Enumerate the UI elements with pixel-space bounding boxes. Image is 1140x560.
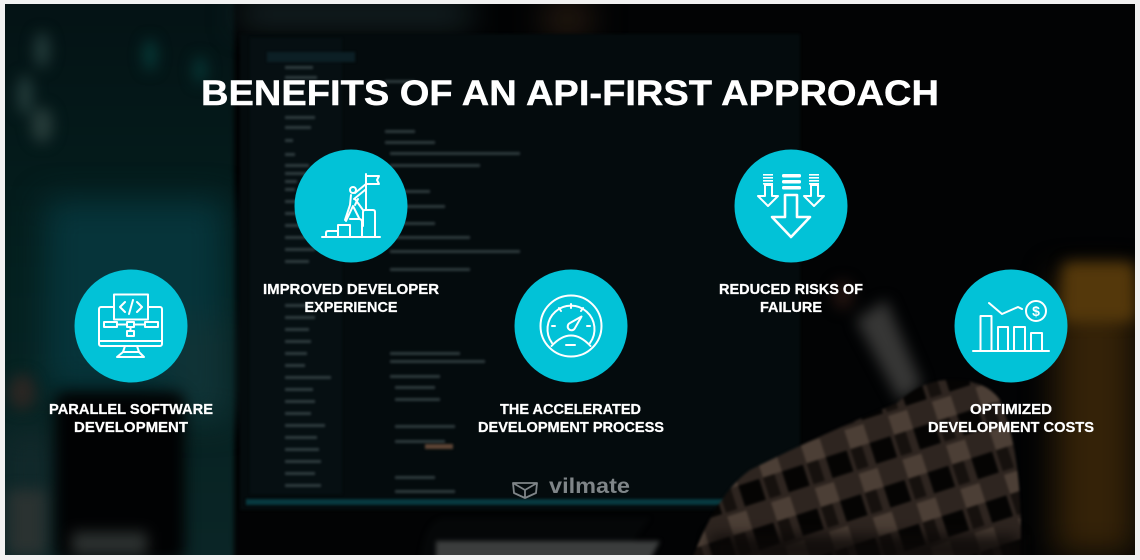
plaid shirt bbox=[690, 380, 1021, 560]
label: optimized bbox=[928, 402, 1094, 436]
label: parallel: PARALLEL SOFTWARE bbox=[49, 402, 213, 418]
label: accelerated bbox=[478, 402, 664, 436]
label: optimized: OPTIMIZED bbox=[970, 402, 1052, 418]
icon: falling cost chart: $ bbox=[1032, 303, 1040, 319]
label: reduced bbox=[719, 282, 863, 316]
label: optimized: DEVELOPMENT COSTS bbox=[928, 420, 1094, 436]
label: parallel bbox=[49, 402, 213, 436]
wordmark: vilmate bbox=[549, 475, 630, 498]
label: accelerated: THE ACCELERATED bbox=[500, 402, 641, 418]
circle: parallel bbox=[74, 270, 188, 382]
circle: optimized bbox=[954, 270, 1068, 382]
item: accelerated development process bbox=[478, 270, 664, 436]
icon: down arrows bbox=[758, 174, 824, 237]
icon: climber with flag bbox=[322, 174, 380, 237]
label: improved bbox=[263, 282, 440, 316]
label: accelerated: DEVELOPMENT PROCESS bbox=[478, 420, 664, 436]
circle: accelerated bbox=[514, 270, 628, 382]
label: reduced: FAILURE bbox=[760, 300, 822, 316]
item: parallel software development bbox=[49, 270, 213, 436]
icon: monitor with code bbox=[99, 294, 162, 357]
icon: vilmate envelope bbox=[513, 483, 537, 498]
circle: reduced bbox=[734, 150, 848, 262]
item: improved developer experience bbox=[263, 150, 440, 316]
item: optimized development costs bbox=[928, 270, 1094, 436]
logo: vilmate bbox=[513, 475, 630, 498]
title: BENEFITS OF AN API-FIRST APPROACH bbox=[201, 74, 939, 113]
label: reduced: REDUCED RISKS OF bbox=[719, 282, 863, 298]
item: reduced risks of failure bbox=[719, 150, 863, 316]
label: improved: IMPROVED DEVELOPER bbox=[263, 282, 440, 298]
icon: falling cost chart bbox=[973, 301, 1049, 351]
label: parallel: DEVELOPMENT bbox=[74, 420, 188, 436]
icon: speedometer bbox=[540, 296, 602, 356]
monitor screen with code bbox=[240, 34, 800, 510]
circle: improved bbox=[294, 150, 408, 262]
label: improved: EXPERIENCE bbox=[304, 300, 398, 316]
